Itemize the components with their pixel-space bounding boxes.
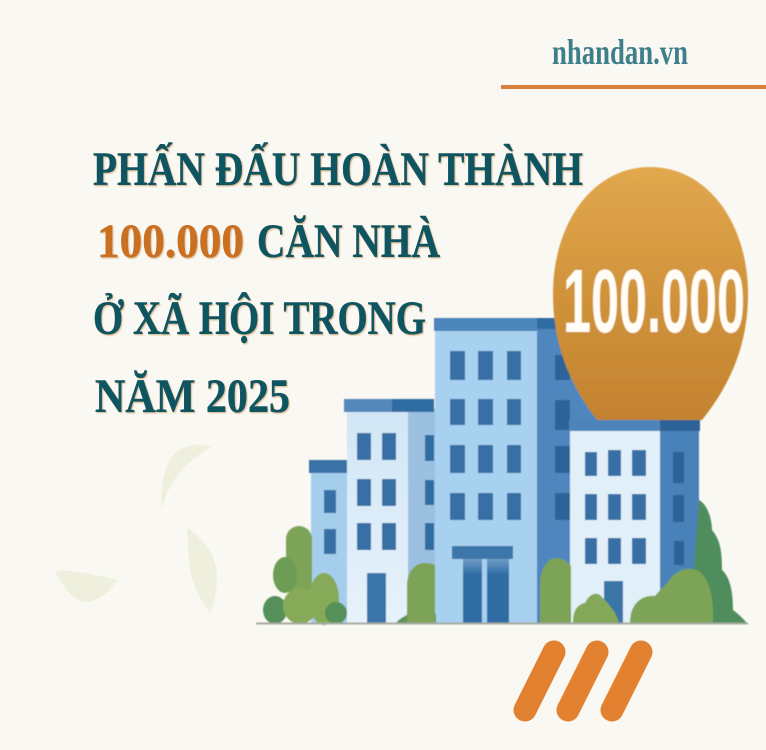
tree: between buildings xyxy=(396,563,436,623)
publisher logo: nhandan.vn: nhandan.vn xyxy=(552,32,688,72)
decorative leaves xyxy=(55,445,217,613)
title line 1: PHẤN ĐẤU HOÀN THÀNH xyxy=(93,141,583,196)
orange 100.000 badge xyxy=(553,167,748,420)
medium building xyxy=(344,399,435,623)
title line 2 xyxy=(97,214,440,268)
ground line xyxy=(256,622,748,624)
small left building xyxy=(309,460,349,623)
title xyxy=(93,141,583,423)
header rule xyxy=(501,85,766,89)
illustration: apartment buildings with badge xyxy=(256,167,748,625)
title line 3: Ở XÃ HỘI TRONG xyxy=(93,291,426,345)
title line 2 remainder: CĂN NHÀ xyxy=(257,214,440,268)
trees: far left xyxy=(263,526,347,625)
entrance xyxy=(452,546,513,623)
right building xyxy=(569,420,700,623)
tall main building xyxy=(434,318,603,623)
trees: far right xyxy=(630,500,748,624)
highlighted number: 100.000 xyxy=(97,215,244,268)
title line 4: NĂM 2025 xyxy=(95,369,290,423)
orange diagonal stripes xyxy=(525,652,641,710)
tree: by the right building xyxy=(540,558,619,623)
